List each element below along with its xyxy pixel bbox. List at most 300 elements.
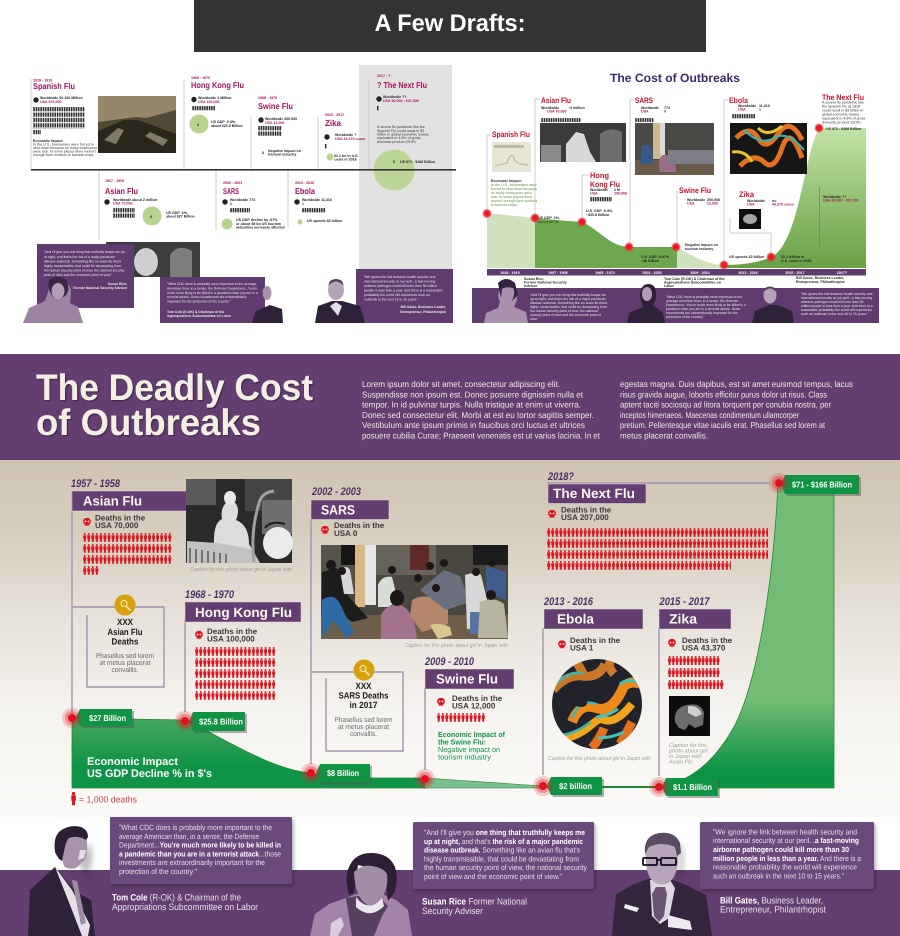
panel: draft two area chart: Appropriations Subcommittee on <box>664 280 721 284</box>
panel: draft one timeline: international security at our peril...a fast-moving <box>364 280 435 284</box>
callout: Asian flu deaths: Phasellus sed lorem <box>96 652 154 660</box>
panel: draft one timeline: about $25.8 Billion <box>211 124 243 128</box>
caption: Caption for this photo about girl in Japan with <box>405 642 508 649</box>
tag: $27 Billion <box>76 709 134 728</box>
panel: draft two area chart: Asian Flu <box>541 96 571 105</box>
panel: draft two area chart: Worldwide <box>687 198 705 202</box>
portrait: Tom Cole <box>28 826 95 936</box>
deaths <box>334 521 385 538</box>
panel: draft one timeline: Ebola <box>295 186 315 196</box>
panel: draft one timeline: Worldwide 50-100 Million <box>40 96 83 100</box>
header bar <box>72 491 199 511</box>
panel: draft two area chart: USA <box>738 108 746 112</box>
panel: draft two area chart: could result in $3 trillion in <box>822 108 863 112</box>
panel: draft one timeline: terrorist attack...those investments are extraordinarily <box>167 295 247 299</box>
panel: draft two area chart: 2002 - 2003 <box>642 271 662 275</box>
panel: draft two area chart: Negative impact on <box>685 243 718 247</box>
panel: quotes footer band <box>0 870 900 936</box>
panel: draft one timeline: Worldwide 200,000 <box>265 117 297 121</box>
deaths: Deaths in the <box>207 627 258 636</box>
panel: draft two area chart: security point of view and the economic point of <box>530 313 601 317</box>
panel: draft one timeline: Worldwide 1 Million <box>198 96 231 100</box>
panel: Susan Rice quote: the human security point of view, the national security <box>424 863 587 872</box>
panel: draft two area chart: ~$25.8 Billion <box>586 213 609 217</box>
portrait: Susan Rice <box>310 853 412 936</box>
panel: draft two area chart: ~2 million <box>568 106 585 110</box>
deaths <box>452 694 503 710</box>
panel: draft one timeline: Worldwide about 2 million <box>113 198 157 202</box>
panel: main header band <box>0 354 900 460</box>
year: 2013 - 2016 <box>543 596 594 608</box>
person icons <box>437 713 486 723</box>
photo: ebola virus <box>550 655 644 750</box>
attribution: Susan Rice: Security Adviser <box>422 906 483 916</box>
attribution: Susan Rice: Susan Rice Former National <box>422 896 527 906</box>
panel: draft two area chart: Worldwide <box>541 106 559 110</box>
item: SARS <box>311 486 508 738</box>
panel: draft two area chart: the human security point of view, the national <box>530 309 598 313</box>
panel: draft two area chart: equivalent to 4.8% of gross <box>822 116 866 120</box>
item: Hong Kong Flu <box>185 589 301 702</box>
panel: draft two area chart: U.S. GDP -0.67% <box>641 255 670 259</box>
panel: draft one timeline: industries seriously affected <box>236 226 285 230</box>
panel: draft two area chart: Former National Security <box>524 280 567 284</box>
panel: draft one timeline: at night, and that's the risk of a major pandemic <box>44 255 115 259</box>
deaths <box>561 506 612 522</box>
panel: Tom Cole quote: average American than, in a sense, the Defense <box>119 832 259 841</box>
panel: Tom Cole quote: "What CDC does is probably more important to the <box>119 823 272 832</box>
panel: draft one timeline <box>23 65 456 323</box>
panel: draft one timeline: Zika <box>325 118 341 128</box>
item: Swine Flu <box>424 656 514 762</box>
value tags <box>76 475 861 798</box>
panel: draft two area chart: to harvest crops. <box>491 203 518 207</box>
icon: skull <box>195 631 203 639</box>
panel: draft two area chart: Kong Flu <box>590 180 620 189</box>
panel: draft two area chart: Entrepreneur, Philanthropist <box>796 280 845 284</box>
panel: draft two area chart: 1918 - 1919 <box>500 271 520 275</box>
panel: draft one timeline: Bill Gates, Business Leader, <box>401 305 446 309</box>
swine flu economic impact <box>438 730 506 762</box>
attribution: Tom Cole: Appropriations Subcommittee on Labor <box>112 902 258 912</box>
panel: draft two area chart: the Spanish Flu at 1918 <box>822 104 860 108</box>
panel: main chart background <box>0 460 900 817</box>
panel: draft one timeline: Entrepreneur, Philanthropist <box>400 310 447 314</box>
title <box>36 367 313 443</box>
panel: draft one timeline: 1968 - 1970 <box>191 76 210 80</box>
deaths <box>95 514 146 530</box>
item: The Next Flu <box>547 471 768 572</box>
panel: draft one timeline: USA 12,000 <box>265 121 284 125</box>
tag: $25.8 Billion: $25.8 Billion <box>199 716 243 726</box>
tag: $27 Billion: $27 Billion <box>89 713 126 723</box>
panel: Susan Rice quote: disease outbreak. Something like an avian flu that's <box>424 846 580 854</box>
panel: draft one timeline: outbreak in the next 10 to 15 years." <box>364 298 419 302</box>
year: 2018? <box>547 471 574 483</box>
caption: photo about girl <box>668 748 708 754</box>
panel: draft two area chart: 11,310 <box>759 104 770 108</box>
panel: draft one timeline: USA 43,370 cases <box>335 137 365 141</box>
person icons <box>668 656 724 692</box>
panel: draft two area chart: 1957 - 1958 <box>548 271 568 275</box>
panel: draft one timeline: Hong Kong Flu <box>191 80 244 90</box>
panel: draft two area chart: Bill Gates, Business Leader, <box>796 276 844 280</box>
panel: draft one timeline: 1957 - 1958 <box>105 179 124 183</box>
panel: draft two area chart: SARS <box>635 96 654 105</box>
header bar <box>311 500 389 520</box>
panel: draft one timeline: Asian Flu <box>105 186 138 196</box>
legend: = 1,000 deaths <box>79 794 137 804</box>
panel: draft one timeline: 1918 - 1919 <box>33 78 52 82</box>
panel: draft one timeline: $1.1 bn in U.S. <box>334 154 359 158</box>
intro text: inceptos himenaeos. Maecenas condimentum ullamcorper <box>620 410 799 420</box>
panel: draft two area chart: global economic losses, <box>822 112 860 116</box>
panel: draft two area chart: Hong <box>590 171 609 180</box>
chart label: economic impact: Economic Impact <box>87 756 178 768</box>
panel: draft one timeline: Negative impact on <box>268 149 301 153</box>
swine flu economic impact: the Swine Flu: <box>438 738 486 746</box>
panel: draft two area chart: Tom Cole (R-OK) & Chairman of the <box>664 277 725 281</box>
deaths: USA 100,000 <box>207 634 255 644</box>
panel: draft two area chart: forced to shut down because <box>491 187 537 191</box>
chart label: economic impact: US GDP Decline % in $'s <box>87 768 212 780</box>
panel: draft two area chart <box>472 71 879 323</box>
panel: draft one timeline: Tom Cole (R-OK) & Chairman of the <box>167 310 224 314</box>
panel: draft one timeline: 2015 - 2017 <box>325 113 344 117</box>
panel: draft one timeline: shut down because so many employees <box>33 146 97 150</box>
panel: draft two area chart: about $27 B <box>538 220 559 224</box>
header bar <box>548 484 646 504</box>
panel: Susan Rice quote: highly transmissible, that could be devastating from <box>424 854 579 864</box>
panel: draft two area chart: 1968 - 1970 <box>595 271 615 275</box>
panel: Tom Cole quote: Department...You're much more likely to be killed in <box>119 840 281 850</box>
intro text: Lorem ipsum dolor sit amet, consectetur adipiscing elit. <box>362 379 560 389</box>
panel: draft two area chart: Economic Impact: <box>491 179 522 183</box>
panel: Susan Rice quote: "And I'll give you one thing that truthfully keeps me <box>424 828 585 837</box>
panel: draft one timeline: much more likely to be killed in a pandemic than you are in a <box>167 291 258 295</box>
panel: draft one timeline: "We ignore the link between health security and <box>364 275 436 279</box>
swine flu economic impact: Economic Impact of <box>438 730 506 739</box>
attribution: Tom Cole <box>112 892 258 912</box>
panel: Tom Cole quote: a pandemic than you are in a terrorist attack...those <box>119 850 281 858</box>
panel: draft one timeline: $ <box>150 215 152 219</box>
panel: draft one timeline: airborne pathogen could kill more than 30 million <box>364 284 437 288</box>
panel: draft one timeline: tourism industry <box>268 152 296 156</box>
panel: draft two area chart: 1 <box>759 108 761 112</box>
panel: draft one timeline: were sick. In some places there weren't <box>33 150 96 154</box>
caption: Caption for this photo about girl in Japan with <box>548 755 651 762</box>
panel: draft two area chart: USA <box>747 202 755 206</box>
deaths: USA 70,000 <box>95 521 139 530</box>
panel: Bill Gates quote: international security at our peril...a fast-moving <box>713 836 859 845</box>
panel: draft one timeline: USA 675,000 <box>40 100 61 104</box>
panel: draft two area chart: U.S. costs in 2016 <box>781 259 812 263</box>
icon: skull <box>83 518 91 526</box>
panel: draft one timeline: USA 90,000 - 207,000 <box>383 99 419 103</box>
panel: draft two area chart: Department...You're much more likely to be killed in a <box>666 303 746 307</box>
deaths: Deaths in the <box>452 694 503 703</box>
panel: draft one timeline: In the U.S., businesses were forced to <box>33 142 94 146</box>
header bar <box>544 609 643 629</box>
photo: brain scan <box>669 696 710 736</box>
panel: draft two area chart: 200,000 <box>707 198 720 202</box>
panel: draft two area chart: U.S. GDP -0.4%, <box>586 209 613 213</box>
panel: Bill Gates quote: reasonable probability the world will experience <box>713 862 857 872</box>
panel: Bill Gates quote: million people in less than a year. And there is a <box>713 854 862 863</box>
panel: draft two area chart: Advisor <box>524 284 538 288</box>
attribution: Susan Rice <box>422 896 527 916</box>
header bar: The Next Flu <box>553 486 635 501</box>
item: Ebola <box>543 596 651 762</box>
panel: draft two area chart: highly transmissible, that could be devastating from <box>530 305 607 309</box>
panel: draft two area chart: 2009 - 2010 <box>690 271 710 275</box>
intro text: aptent taciti sociosqu ad litora torquent per conubia nostra, per <box>620 400 831 410</box>
panel: draft one timeline: USA 100,000 <box>198 100 219 104</box>
callout: SARS deaths: convallis. <box>350 730 377 738</box>
panel: draft one timeline: disease outbreak. Something like an avian flu that's <box>44 260 121 264</box>
intro text: posuere cubilia Curae; Praesent venenatis est ut varius lacinia. In et <box>362 430 601 440</box>
panel: draft one timeline: $ <box>393 160 395 164</box>
heading: a few drafts banner <box>194 0 706 52</box>
panel: draft one timeline: Swine Flu <box>258 101 293 111</box>
chart label: economic impact <box>87 756 212 780</box>
header bar <box>659 609 731 629</box>
deaths: USA 0 <box>334 529 358 538</box>
callout: SARS deaths: in 2017 <box>350 700 378 710</box>
panel: Susan Rice quote: point of view and the economic point of view." <box>424 872 562 881</box>
tag: $2 billion: $2 billion <box>559 781 592 791</box>
panel: draft two area chart: Zika <box>739 190 755 199</box>
panel: draft two area chart: USA <box>687 202 695 206</box>
panel: draft one timeline: ? The Next Flu <box>377 80 427 90</box>
panel: draft two area chart: 100,000 <box>614 192 627 196</box>
panel: draft two area chart: Worldwide ?? <box>823 195 846 199</box>
intro text: Donec sed consectetur elit. Morbi at est eu tortor sagittis semper. <box>362 410 594 420</box>
callout: SARS deaths: at metus placerat <box>338 723 389 731</box>
panel: draft two area chart: airborne pathogen could kill more than 30 <box>801 300 864 304</box>
panel: draft two area chart: "We ignore the link between health security and <box>801 292 873 296</box>
panel: draft two area chart: pandemic than you are in a terrorist attack...those <box>666 307 741 311</box>
panel: draft one timeline: domestic product (GDP). <box>377 140 417 144</box>
attribution: Bill Gates <box>720 896 826 914</box>
icon: skull <box>437 698 445 706</box>
panel: draft one timeline: Worldwide ? <box>335 133 356 137</box>
connector lines <box>72 483 770 776</box>
panel: draft one timeline: US GDP -0.4%, <box>211 120 236 124</box>
header bar: Ebola <box>557 612 594 626</box>
intro text: risus gravida augue, lobortis efficitur purus dolor ut risus. Class <box>620 389 827 399</box>
year: 1957 - 1958 <box>71 478 121 490</box>
callout: Asian flu deaths: XXX <box>117 617 133 627</box>
red outbreak markers <box>62 473 789 797</box>
panel: draft one timeline: A severe flu pandemic like the <box>377 125 425 129</box>
panel: draft two area chart: average American than, in a sense, the Defense <box>666 299 738 303</box>
deaths: Deaths in the <box>95 514 146 523</box>
panel: draft one timeline: Worldwide 11,310 <box>302 198 332 202</box>
panel: draft one timeline: Spanish Flu <box>33 81 75 91</box>
intro text: pretium. Pellentesque vitae iaculis erat. Phasellus sed lorem at <box>620 420 826 430</box>
panel: Bill Gates quote: such an outbreak in the next 10 to 15 years." <box>713 872 844 880</box>
panel: draft one timeline: US $71 - $166 Billion <box>400 160 435 164</box>
icon: skull <box>321 526 329 534</box>
deaths <box>682 636 733 652</box>
panel: draft two area chart: such an outbreak in the next 10 to 15 years." <box>801 312 869 316</box>
panel: draft two area chart: Spanish Flu <box>492 130 530 139</box>
header bar: Hong Kong Flu <box>195 605 292 620</box>
panel: draft one timeline: point of view and the economic point of view." <box>44 273 113 277</box>
panel: draft one timeline: Economic Impact <box>33 139 64 143</box>
swine flu economic impact: tourism industry <box>438 752 491 762</box>
panel: draft two area chart: tourism industry <box>685 247 713 251</box>
tag: $71 - $166 Billion <box>781 475 861 496</box>
attribution: Bill Gates: Bill Gates, Business Leader, <box>720 896 823 906</box>
panel: draft two area chart: "What CDC does is probably more important to the <box>666 295 742 299</box>
panel: draft two area chart: protection of the country." <box>666 315 705 319</box>
legend <box>71 792 137 805</box>
panel: draft two area chart: domestic product (GDP). <box>822 120 862 124</box>
panel: draft one timeline: 0 <box>230 202 232 206</box>
header bar: Swine Flu <box>436 672 498 686</box>
swine flu economic impact: Negative impact on <box>438 745 500 754</box>
panel: draft one timeline: $ <box>197 123 199 127</box>
panel: draft two area chart: 774 <box>664 106 670 110</box>
panel: draft two area chart: investments are extraordinarily important for the <box>666 311 738 315</box>
chart: economic impact area <box>72 485 834 788</box>
panel: draft one timeline: US GDP -1%, <box>166 211 188 215</box>
panel: Susan Rice quote: up at night, and that's the risk of a major pandemic <box>424 837 583 846</box>
panel: draft two area chart: In the U.S., businesses were <box>491 183 537 187</box>
panel: draft two area chart: A severe flu pandemic like <box>822 100 864 104</box>
panel: Bill Gates quote <box>700 822 874 889</box>
photo: girl in Japan <box>186 479 293 563</box>
tag: $8 Billion: $8 Billion <box>327 768 359 778</box>
callout: Asian flu deaths: Deaths <box>112 636 138 646</box>
panel: draft two area chart: USA 70,000 <box>547 110 566 114</box>
panel: draft one timeline: Susan Rice, <box>108 282 127 286</box>
panel: Tom Cole quote: investments are extraordinarily important for the <box>119 858 265 867</box>
year: 1968 - 1970 <box>185 589 235 601</box>
callout: SARS deaths: XXX <box>356 681 372 691</box>
intro text <box>362 379 853 440</box>
deaths: USA 43,370 <box>682 644 726 652</box>
panel: draft one timeline: Former National Security Advisor <box>73 286 128 290</box>
panel: draft two area chart: $1.1 Billion in <box>781 255 804 259</box>
person icons <box>547 528 768 572</box>
panel: draft two area chart: USA <box>590 192 598 196</box>
panel: draft two area chart: weren't enough farm workers <box>491 199 537 203</box>
header bar: Zika <box>669 612 698 626</box>
tag: $1.1 Billion <box>662 778 720 798</box>
caption <box>668 742 708 766</box>
year: 2015 - 2017 <box>659 596 710 608</box>
panel: draft one timeline: 2002 - 2003 <box>223 181 242 185</box>
panel: Susan Rice quote <box>413 822 594 889</box>
panel: draft two area chart: Worldwide <box>641 106 659 110</box>
caption: Caption for this photo about girl in Japan with <box>190 566 292 573</box>
person icons <box>195 647 276 702</box>
panel: draft one timeline: US GDP decline by .67% <box>236 218 278 222</box>
panel: draft one timeline: equivalent to 4.8% of gross <box>377 136 421 140</box>
caption: Asian Flu <box>668 758 692 766</box>
intro text: Suspendisse non ipsum est. Donec posuere dignissim nulla et <box>362 389 584 399</box>
panel: draft one timeline: 2017 - ? <box>377 74 390 78</box>
panel: draft two area chart: Worldwide <box>590 188 608 192</box>
item: Asian Flu <box>71 478 293 674</box>
panel: draft one timeline: 1968 - 1970 <box>258 96 277 100</box>
panel: draft one timeline: Appropriations Subcommittee on Labor <box>167 314 232 318</box>
panel: draft one timeline: probability the world will experience such an <box>364 293 430 297</box>
title: The Deadly Cost <box>36 367 313 408</box>
panel: draft two area chart: million people in less than a year. And there is a <box>801 304 873 308</box>
person icons <box>83 533 172 577</box>
tag: $2 billion <box>547 777 604 797</box>
tag: $8 Billion <box>316 764 372 785</box>
panel: draft two area chart: view." <box>530 317 540 321</box>
panel: draft two area chart: so many employees were <box>491 191 532 195</box>
deaths: USA 12,000 <box>452 702 496 710</box>
panel: draft two area chart: up at night, and that's the risk of a major pandemic <box>530 297 606 301</box>
panel: draft two area chart: 2017? <box>837 271 847 275</box>
deaths: Deaths in the <box>682 636 733 645</box>
icon: skull <box>668 639 676 647</box>
panel: draft two area chart: reasonable probability the world will experience <box>801 308 872 312</box>
panel: draft one timeline: Worldwide 774 <box>230 198 255 202</box>
panel: draft one timeline: trillion in global economic losses, <box>377 132 429 136</box>
panel: Bill Gates quote: "We ignore the link between health security and <box>713 828 857 836</box>
panel: Bill Gates quote: airborne pathogen could kill more than 30 <box>713 845 849 854</box>
panel: draft two area chart: USA <box>641 110 649 114</box>
panel: draft one timeline: SARS <box>223 186 239 196</box>
panel: draft two area chart: ~$8 Billion <box>641 259 659 263</box>
panel: draft one timeline: Spanish Flu could result in $3 <box>377 129 424 133</box>
panel: draft two area chart: 0 <box>664 110 666 114</box>
panel: draft one timeline: costs in 2016 <box>334 158 357 162</box>
caption: in Japan with <box>669 753 702 760</box>
attribution: Tom Cole: Tom Cole (R-OK) & Chairman of the <box>112 892 241 902</box>
icon: skull <box>548 510 556 518</box>
deaths: Deaths in the <box>334 521 385 530</box>
intro text: metus placerat convallis. <box>620 430 708 440</box>
year: 2009 - 2010 <box>424 656 475 668</box>
callout: Asian flu deaths: Asian Flu <box>108 627 142 637</box>
panel: draft two area chart: 2015 - 2017 <box>785 271 805 275</box>
panel: draft one timeline: 1 <box>302 202 304 206</box>
panel: draft one timeline: highly transmissible, that could be devastating from <box>44 264 121 268</box>
item: Zika <box>659 596 733 766</box>
panel: draft two area chart: disease outbreak. Something like an avian flu that's <box>530 301 607 305</box>
panel: draft two area chart: Worldwide <box>738 104 756 108</box>
panel: draft one timeline: enough farm workers to harvest crops. <box>33 153 94 157</box>
callout: SARS deaths: Phasellus sed lorem <box>334 716 393 724</box>
deaths <box>570 636 621 652</box>
panel: draft one timeline: the human security point of view, the national security <box>44 268 125 272</box>
callout: Asian flu deaths: at metus placerat <box>100 659 151 667</box>
title: of Outbreaks <box>36 402 261 443</box>
panel: draft two area chart: Ebola <box>729 96 748 105</box>
callout: Asian flu deaths: convallis. <box>112 666 139 674</box>
panel: draft two area chart: sick. In some places there <box>491 195 533 199</box>
panel: draft one timeline: about $27 Billion <box>166 214 195 218</box>
intro text: Vestibulum ante ipsum primis in faucibus orci luctus et ultrices <box>362 420 585 430</box>
panel: draft two area chart: The Cost of Outbreaks <box>610 71 740 85</box>
deaths: Deaths in the <box>570 636 621 645</box>
deaths: Deaths in the <box>561 506 612 514</box>
panel: draft two area chart: Worldwide <box>747 199 765 203</box>
panel: draft one timeline: Worldwide ?? <box>383 95 406 99</box>
year: 2002 - 2003 <box>311 486 361 498</box>
panel: draft one timeline: US spends $2 billion <box>307 219 342 223</box>
panel: draft two area chart: no <box>772 199 777 203</box>
